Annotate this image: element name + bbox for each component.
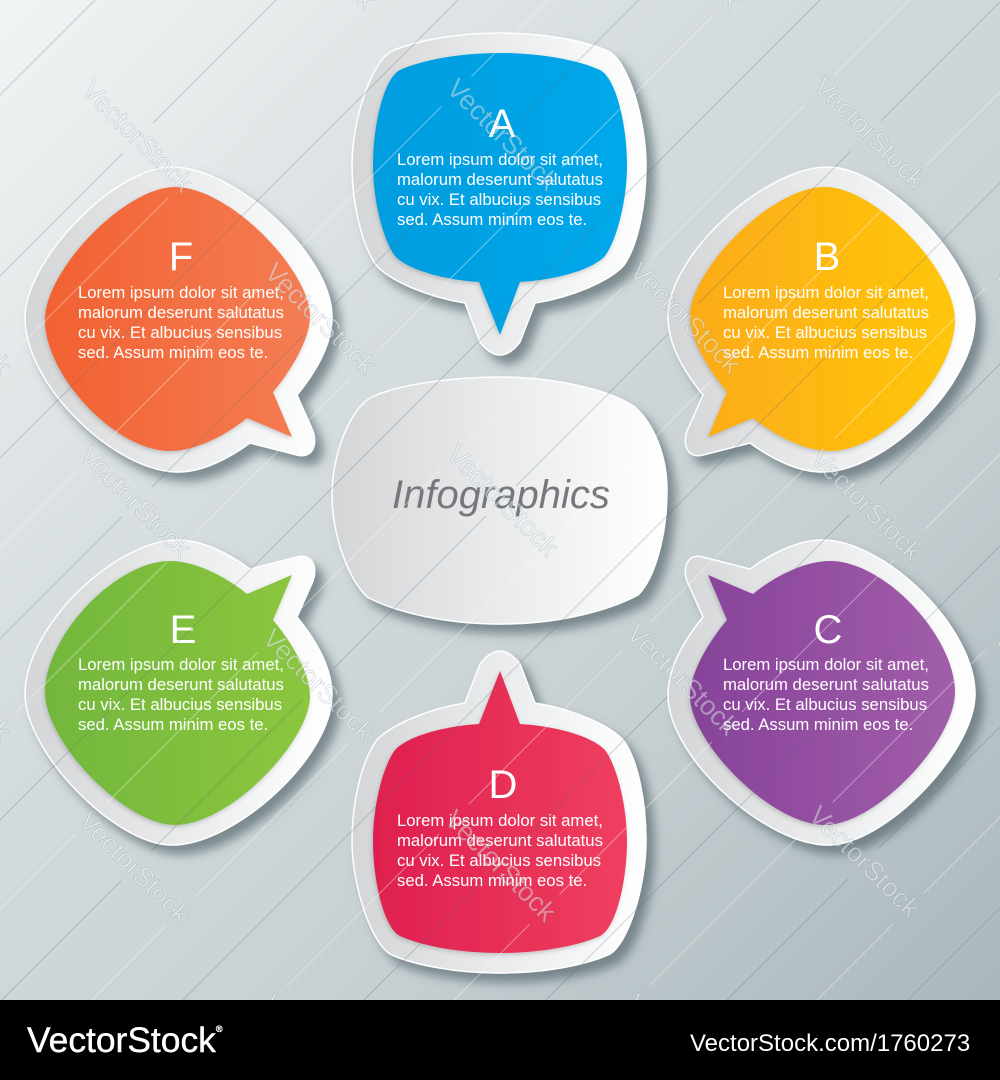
bubble D coloured shape	[373, 671, 627, 953]
watermarks: VectorStock	[805, 443, 928, 567]
panel: centre title plate	[332, 377, 667, 624]
bubble B coloured shape	[690, 187, 955, 451]
text block A: malorum deserunt salutatus	[397, 170, 603, 189]
letter B: B	[814, 235, 840, 279]
footer logo text: VectorStock	[27, 1020, 216, 1060]
panel: bubble D	[352, 651, 646, 973]
bubble F paper base	[25, 167, 332, 472]
watermarks: VectorStock	[803, 800, 926, 924]
watermarks: VectorStock	[76, 75, 199, 199]
text block E: malorum deserunt salutatus	[78, 675, 284, 694]
text block D: Lorem ipsum dolor sit amet,	[397, 811, 603, 830]
footer bar	[0, 1000, 1000, 1080]
panel: bubble C	[668, 540, 975, 845]
text block D: cu vix. Et albucius sensibus	[397, 851, 601, 870]
text block A: cu vix. Et albucius sensibus	[397, 190, 601, 209]
text block F: cu vix. Et albucius sensibus	[78, 323, 282, 342]
footer logo text: ®	[216, 1024, 223, 1034]
watermarks: VectorStock	[74, 440, 197, 564]
bubble C paper base	[668, 540, 975, 845]
watermarks: VectorStock	[624, 256, 747, 380]
bubble A coloured shape	[373, 53, 627, 335]
watermarks: VectorStock	[259, 257, 382, 381]
text block E: cu vix. Et albucius sensibus	[78, 695, 282, 714]
watermarks: VectorStock	[439, 804, 562, 928]
panel: bubble A	[352, 33, 646, 355]
bubble D paper base	[352, 651, 646, 973]
text block B: malorum deserunt salutatus	[723, 303, 929, 322]
bubble A paper base	[352, 33, 646, 355]
letter E: E	[170, 608, 196, 652]
panel: bubble B	[668, 167, 975, 472]
text block C: malorum deserunt salutatus	[723, 675, 929, 694]
bubble E coloured shape	[45, 561, 310, 825]
text block F: malorum deserunt salutatus	[78, 303, 284, 322]
text block F: sed. Assum minim eos te.	[78, 343, 268, 362]
text block D: malorum deserunt salutatus	[397, 831, 603, 850]
watermarks: VectorStock	[621, 618, 744, 742]
footer url: VectorStock.com/1760273	[690, 1030, 970, 1057]
bubble F coloured shape	[45, 187, 310, 451]
letter A: A	[489, 102, 516, 146]
bubble C coloured shape	[690, 561, 955, 825]
text block C: Lorem ipsum dolor sit amet,	[723, 655, 929, 674]
text block C: cu vix. Et albucius sensibus	[723, 695, 927, 714]
text block D: sed. Assum minim eos te.	[397, 871, 587, 890]
text block C: sed. Assum minim eos te.	[723, 715, 913, 734]
letter C: C	[814, 608, 842, 652]
letter D: D	[489, 763, 517, 807]
text block A: sed. Assum minim eos te.	[397, 210, 587, 229]
watermarks: VectorStock	[808, 71, 931, 195]
watermarks: VectorStock	[257, 623, 380, 747]
watermarks: VectorStock	[73, 806, 196, 930]
text block E: Lorem ipsum dolor sit amet,	[78, 655, 284, 674]
text block B: sed. Assum minim eos te.	[723, 343, 913, 362]
text block A: Lorem ipsum dolor sit amet,	[397, 150, 603, 169]
panel: bubble F	[25, 167, 332, 472]
panel: bubble E	[25, 540, 332, 845]
text block E: sed. Assum minim eos te.	[78, 715, 268, 734]
text block F: Lorem ipsum dolor sit amet,	[78, 283, 284, 302]
centre plate shape	[332, 377, 667, 624]
watermarks: VectorStock	[441, 73, 564, 197]
bubble E paper base	[25, 540, 332, 845]
heading: Infographics: Infographics	[392, 473, 610, 517]
watermarks: VectorStock	[441, 439, 564, 563]
letter F: F	[169, 235, 193, 279]
text block B: cu vix. Et albucius sensibus	[723, 323, 927, 342]
bubble B paper base	[668, 167, 975, 472]
text block B: Lorem ipsum dolor sit amet,	[723, 283, 929, 302]
